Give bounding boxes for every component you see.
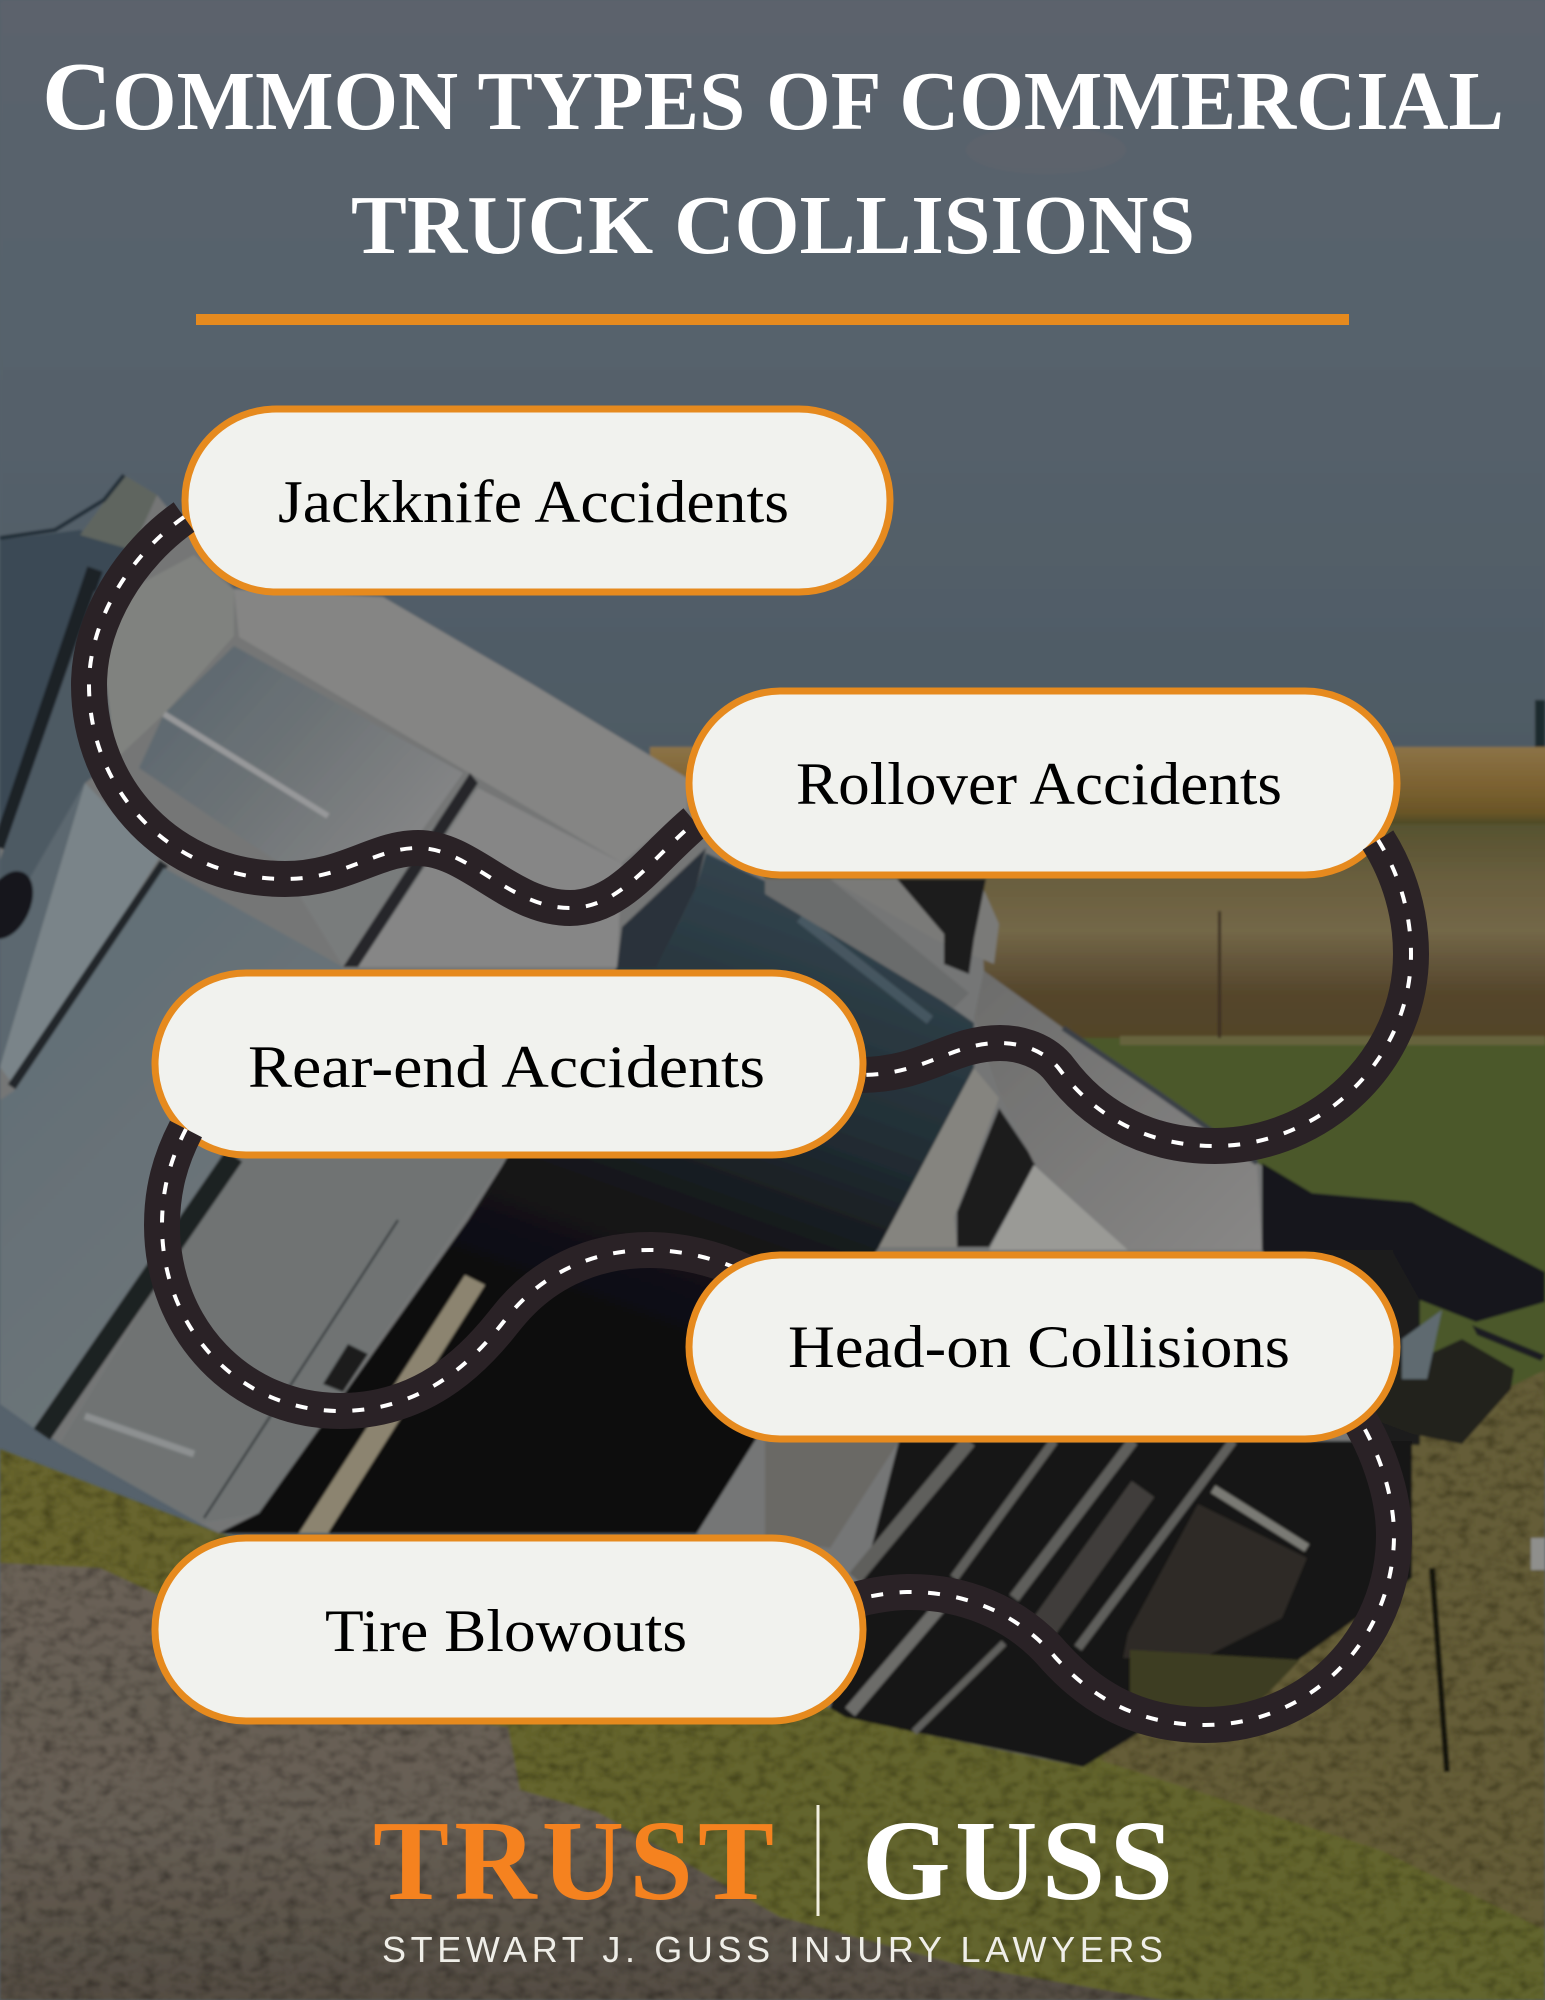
road: Rollover to Rear-end <box>860 840 1411 1146</box>
logo: Trust Guss <box>373 1797 1173 1970</box>
lower grass <box>0 1370 1545 2000</box>
left light panel <box>0 783 159 1087</box>
door seam <box>204 1220 398 1518</box>
dry grass lower right <box>1100 1370 1545 1930</box>
distant cloud <box>966 126 1126 174</box>
pill: Head-on Collisions: Head-on Collisions <box>788 1314 1290 1380</box>
wrecked front parts <box>1262 1163 1545 1322</box>
pill: Rollover Accidents <box>689 691 1397 875</box>
dark opening on the cab side <box>0 863 43 947</box>
sand strip at field edge <box>1120 1036 1545 1045</box>
corn field <box>650 747 1545 824</box>
hood dark edge <box>1063 1028 1257 1163</box>
door panel right <box>879 1068 999 1247</box>
side vent <box>12 863 164 1087</box>
title <box>42 43 1504 272</box>
panel under the roof <box>139 646 463 863</box>
logo word GUSS: GUSS <box>862 1797 1173 1924</box>
silver side panel <box>830 879 999 964</box>
gray lower cab <box>765 1441 899 1548</box>
trailer rear dark panel <box>0 530 132 848</box>
pill: Rear-end Accidents: Rear-end Accidents <box>248 1034 765 1100</box>
pill: Jackknife Accidents: Jackknife Accidents <box>278 469 789 535</box>
lower white panel <box>989 1165 1128 1250</box>
green grass right <box>650 1038 1545 1458</box>
pillar <box>617 848 706 967</box>
logo divider <box>816 1805 820 1916</box>
pill: Jackknife Accidents <box>185 409 890 592</box>
hood <box>974 971 1262 1250</box>
roof rail above windshield <box>765 879 969 1008</box>
cab window <box>957 1108 1036 1247</box>
white object <box>1531 1538 1545 1570</box>
road: Rear-end to Head-on <box>162 1129 745 1411</box>
mirror <box>897 879 986 974</box>
door sill <box>299 1275 485 1533</box>
black cab front <box>219 853 974 1533</box>
pill: Tire Blowouts <box>155 1538 863 1721</box>
tree on the horizon <box>1535 700 1545 747</box>
wreck lower parts <box>1372 1339 1514 1444</box>
frame rail <box>0 475 124 538</box>
radiator fins <box>1043 1489 1143 1628</box>
grille bars <box>850 1441 1233 1732</box>
radiator top chrome <box>1213 1489 1307 1548</box>
door panel <box>60 1150 510 1523</box>
lower left large panel <box>0 868 343 1434</box>
road: Jackknife to Rollover <box>89 517 695 908</box>
panel right of stripe <box>358 788 622 967</box>
pill: Head-on Collisions <box>689 1255 1397 1439</box>
panel reflection <box>85 1416 194 1454</box>
logo word TRUST: TRUST <box>373 1797 774 1924</box>
left blue panel <box>0 590 115 930</box>
light reflection on panel <box>164 714 328 816</box>
truck body base <box>0 475 1412 1767</box>
pill: Rollover Accidents: Rollover Accidents <box>796 751 1282 817</box>
title line 1: COMMON TYPES OF COMMERCIAL <box>42 43 1504 151</box>
road: Head-on to Tire Blowouts <box>855 1405 1394 1725</box>
cab panel stripe upper <box>343 773 478 967</box>
radiator <box>1123 1504 1307 1658</box>
windshield reflection <box>800 918 930 1020</box>
central panel <box>279 788 478 967</box>
gravel shoulder <box>0 1563 1163 2000</box>
sky <box>0 0 1545 760</box>
fence post <box>1218 911 1221 1038</box>
title line 2: TRUCK COLLISIONS <box>351 179 1195 272</box>
dark grass inside road loop <box>1130 1650 1300 1712</box>
cab panel stripe lower <box>42 1156 234 1434</box>
wreck behind the head-on pill <box>1262 1250 1420 1445</box>
title underline <box>196 314 1349 325</box>
dry field <box>650 824 1545 1038</box>
upper frame <box>80 475 157 550</box>
roof band <box>234 589 687 863</box>
logo tagline: STEWART J. GUSS INJURY LAWYERS <box>382 1929 1163 1970</box>
pill: Tire Blowouts: Tire Blowouts <box>325 1598 687 1664</box>
plate <box>323 1344 368 1392</box>
post on right <box>1432 1568 1447 1772</box>
cab corner <box>100 555 234 760</box>
left lower dark panel <box>0 783 85 1067</box>
dark rear edge stripe <box>0 569 95 848</box>
pill: Rear-end Accidents <box>155 973 863 1155</box>
blade part <box>1472 1325 1545 1361</box>
blue broken part <box>1402 1310 1442 1379</box>
grille dark area <box>830 1441 1412 1767</box>
